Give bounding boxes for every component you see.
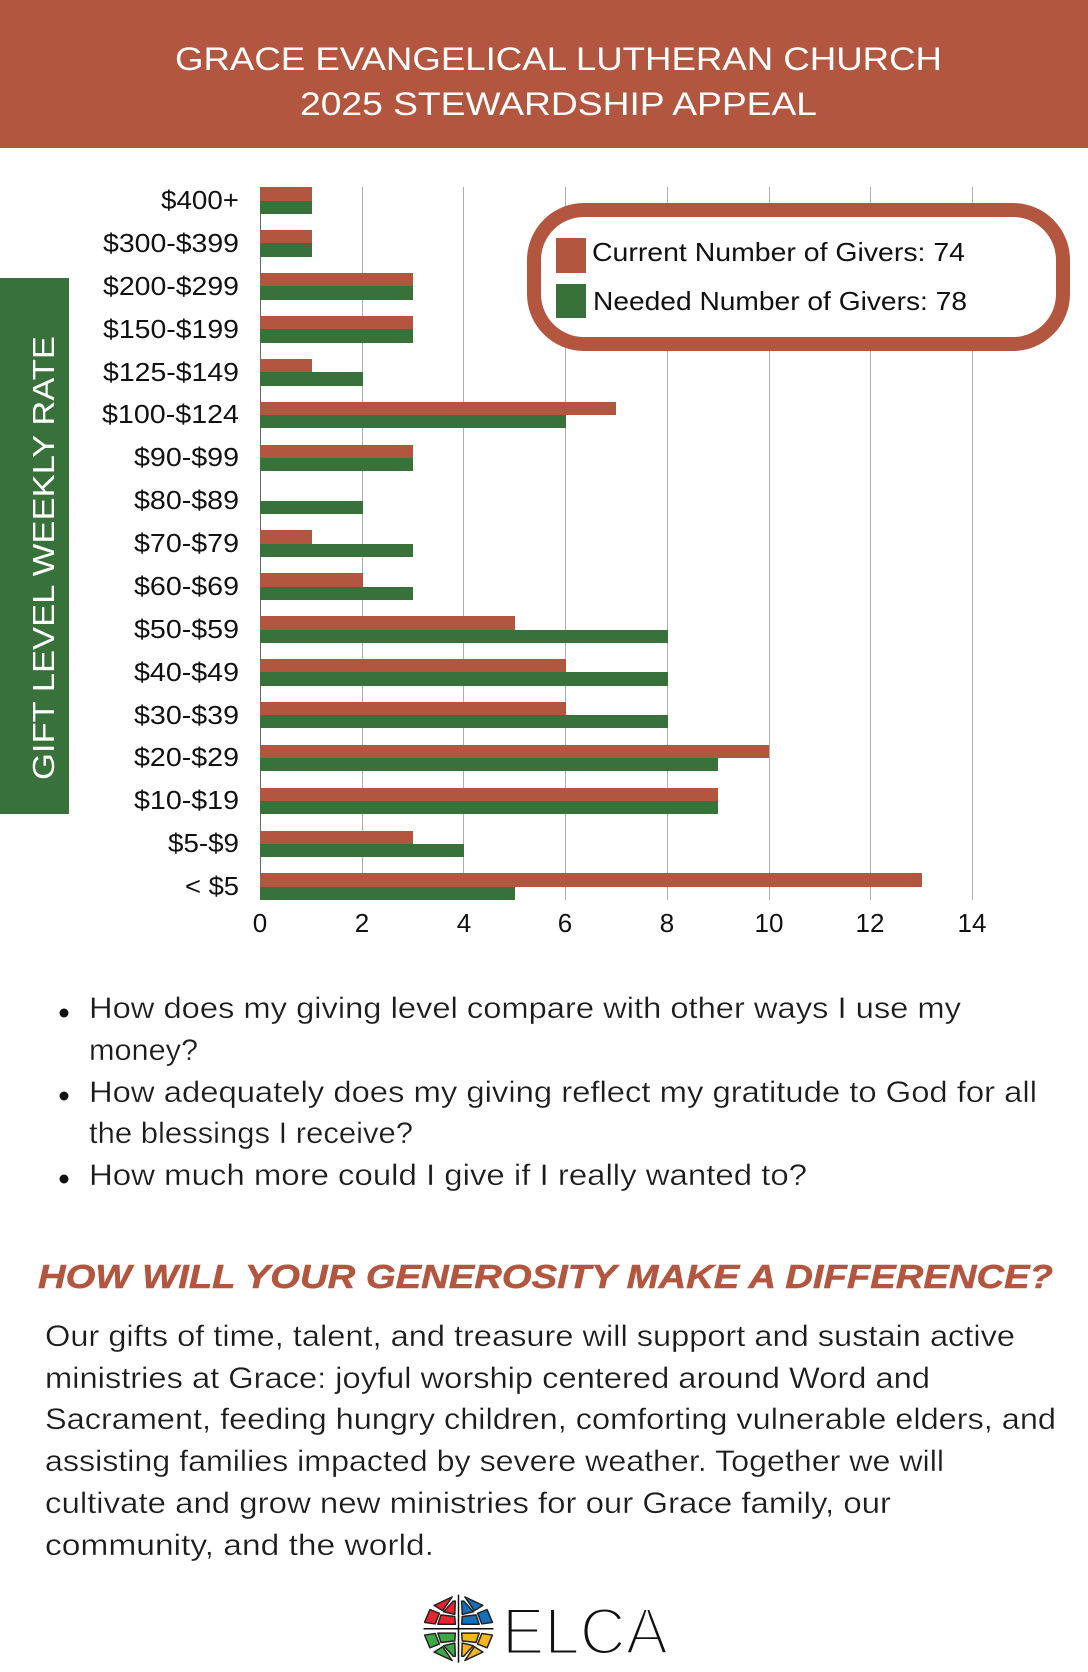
- bar chart: $90-$99: [134, 442, 239, 472]
- bar chart: 0: [253, 908, 267, 938]
- ELCA logo: [424, 1594, 668, 1668]
- reflection questions list: How much more could I give if I really wanted to?: [89, 1159, 807, 1192]
- legend: Current Number of Givers: 74: [592, 237, 965, 267]
- bar chart: 14: [958, 908, 986, 938]
- reflection questions list: How adequately does my giving reflect my gratitude to God for all: [89, 1076, 1037, 1109]
- bar chart: [102, 185, 986, 938]
- title banner: GRACE EVANGELICAL LUTHERAN CHURCH: [175, 41, 942, 77]
- bar chart: $200-$299: [103, 271, 239, 301]
- body paragraph: Our gifts of time, talent, and treasure will support and sustain active: [45, 1320, 1015, 1353]
- bar chart: 8: [660, 908, 674, 938]
- bar chart: $60-$69: [134, 571, 239, 601]
- bar chart: $300-$399: [103, 228, 239, 258]
- bar chart: 6: [558, 908, 572, 938]
- bar chart: $5-$9: [168, 828, 239, 858]
- title banner: [0, 0, 1088, 148]
- body paragraph: Sacrament, feeding hungry children, comforting vulnerable elders, and: [45, 1403, 1056, 1436]
- title banner: 2025 STEWARDSHIP APPEAL: [300, 86, 817, 122]
- legend: [534, 210, 1063, 344]
- bar chart: $30-$39: [134, 700, 239, 730]
- bar chart: $400+: [161, 185, 239, 215]
- body paragraph: [45, 1320, 1056, 1562]
- bar chart: $70-$79: [134, 528, 239, 558]
- section heading: HOW WILL YOUR GENEROSITY MAKE A DIFFERENCE?: [38, 1258, 1053, 1295]
- reflection questions list: money?: [89, 1034, 198, 1067]
- bar chart: $100-$124: [102, 399, 239, 429]
- body paragraph: assisting families impacted by severe weather. Together we will: [45, 1445, 944, 1478]
- bar chart: $20-$29: [134, 742, 239, 772]
- bar chart: $150-$199: [103, 314, 239, 344]
- bar chart: $50-$59: [134, 614, 239, 644]
- bar chart: 10: [755, 908, 783, 938]
- bar chart: 4: [457, 908, 471, 938]
- bar chart: $80-$89: [134, 485, 239, 515]
- ELCA logo: ELCA: [502, 1594, 668, 1668]
- bar chart: $40-$49: [134, 657, 239, 687]
- bar chart: < $5: [185, 871, 239, 901]
- bar chart: $10-$19: [134, 785, 239, 815]
- reflection questions list: How does my giving level compare with other ways I use my: [89, 992, 961, 1025]
- bar chart: 2: [355, 908, 369, 938]
- bar chart: 12: [856, 908, 884, 938]
- body paragraph: ministries at Grace: joyful worship centered around Word and: [45, 1362, 930, 1395]
- vertical axis title: [0, 278, 69, 814]
- legend: Needed Number of Givers: 78: [593, 286, 967, 316]
- body paragraph: cultivate and grow new ministries for our Grace family, our: [45, 1487, 891, 1520]
- body paragraph: community, and the world.: [45, 1529, 434, 1562]
- vertical axis title: GIFT LEVEL WEEKLY RATE: [26, 336, 61, 780]
- bar chart: $125-$149: [103, 357, 239, 387]
- reflection questions list: [60, 992, 1037, 1192]
- reflection questions list: the blessings I receive?: [89, 1117, 413, 1150]
